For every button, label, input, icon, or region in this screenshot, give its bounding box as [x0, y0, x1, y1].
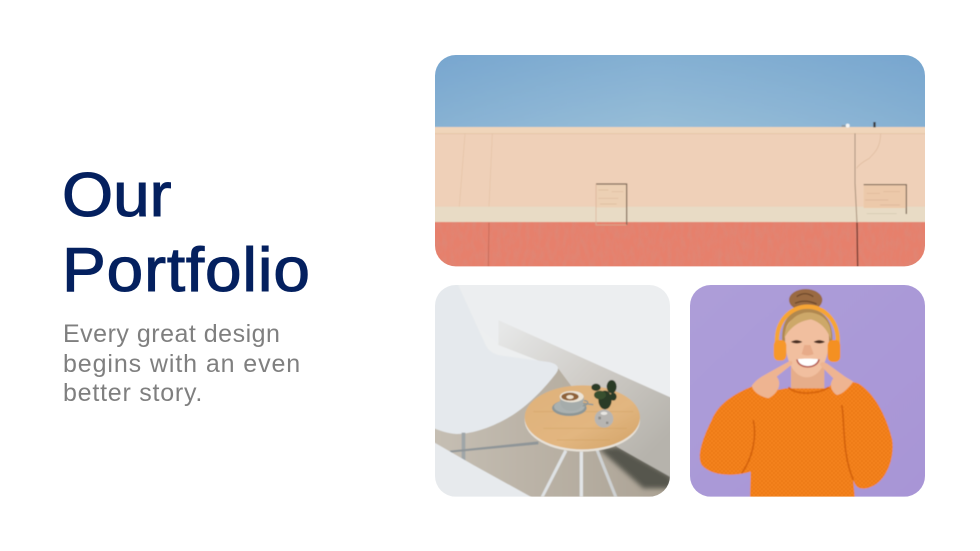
subtitle text: Every great design — [63, 320, 280, 348]
subtitle text: begins with an even — [63, 350, 301, 378]
photo: building wall under blue sky — [435, 55, 925, 266]
photo: white chair and round coffee table — [435, 285, 670, 497]
title: Our — [62, 161, 172, 230]
photo: smiling woman in orange sweater and headphones — [690, 285, 925, 497]
subtitle text: better story. — [63, 379, 203, 407]
subtitle text — [63, 320, 301, 407]
title: Portfolio — [62, 236, 311, 305]
title — [62, 161, 311, 305]
